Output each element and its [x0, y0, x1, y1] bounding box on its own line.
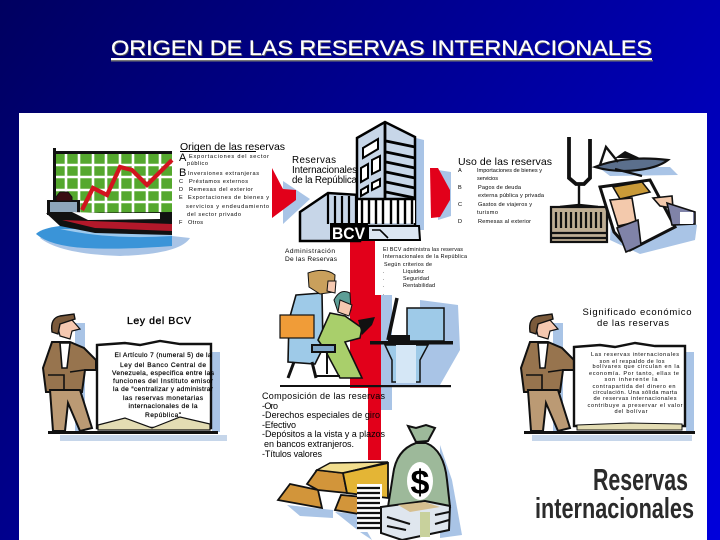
- text block: administración BCV: .: [383, 269, 384, 275]
- arrow: origin into reserves: [272, 168, 310, 224]
- label: reservas internacionales: de la República: [292, 175, 358, 186]
- text block: composición de las reservas: Composición de las reservas: [262, 391, 386, 401]
- illustration: ship and growth chart: [36, 148, 190, 256]
- text block: significado de las reservas: de reservas internacionales: [594, 396, 677, 402]
- logotype: reservas internacionales: [535, 462, 694, 525]
- text block: significado de las reservas: bolívares que circulan en la: [592, 364, 680, 370]
- red vertical connector bar: [350, 238, 445, 460]
- white content panel: [19, 113, 707, 540]
- text block: administración BCV: El BCV administra las reservas: [383, 247, 463, 253]
- text block: uso de las reservas: Uso de las reservas: [458, 156, 552, 168]
- text block: origen de las reservas: [179, 141, 285, 226]
- text block: composición de las reservas: [261, 388, 386, 460]
- text block: composición de las reservas: -Oro: [262, 401, 278, 411]
- text block: uso de las reservas: Remesas al exterior: [478, 219, 531, 225]
- text block: significado de las reservas: del bolívar: [614, 409, 648, 415]
- text block: significado de las reservas: Las reservas internacionales: [591, 352, 679, 358]
- text block: administración BCV: .: [383, 276, 384, 282]
- text block: significado de las reservas: [588, 352, 683, 415]
- text block: uso de las reservas: [458, 156, 552, 225]
- text block: administración BCV: Seguridad: [403, 276, 429, 282]
- text block: significado de las reservas: economía. Por tanto, ellas te: [589, 371, 679, 377]
- text block: uso de las reservas: turismo: [477, 210, 498, 216]
- label: administración de las reservas: De las Reservas: [285, 256, 338, 263]
- heading: significado económico: de las reservas: [597, 318, 669, 329]
- text block: uso de las reservas: Importaciones de bienes y: [477, 168, 542, 174]
- illustration: gold bars, coins and money bag: [278, 425, 462, 540]
- text block: artículo de la ley: El Artículo 7 (numeral 5) de la: [114, 352, 212, 359]
- illustration: people at computer desk: [280, 270, 460, 387]
- label: reservas internacionales: [292, 155, 358, 186]
- text block: artículo de la ley: Venezuela, especifica entre las: [112, 370, 215, 377]
- text block: administración BCV: .: [383, 291, 384, 297]
- text block: origen de las reservas: D: [179, 187, 183, 193]
- text block: composición de las reservas: -Efectivo: [262, 420, 296, 430]
- text block: artículo de la ley: funciones del Instituto emisor: [113, 378, 214, 385]
- text block: administración BCV: Según criterios de: [384, 262, 432, 268]
- text block: uso de las reservas: Gastos de viajeros y: [478, 202, 532, 208]
- text block: origen de las reservas: Origen de las reservas: [180, 141, 285, 153]
- heading: significado económico: [582, 307, 692, 329]
- text block: administración BCV: Liquidez: [403, 269, 424, 275]
- illustration: man with open book (right): [521, 314, 695, 441]
- label: reservas internacionales: Internacionales: [292, 165, 357, 176]
- illustration: man with open book (left): [43, 314, 227, 441]
- title: ORIGEN DE LAS RESERVAS INTERNACIONALES: [112, 38, 653, 61]
- text block: artículo de la ley: Ley del Banco Central de: [120, 362, 206, 369]
- heading: significado económico: Significado económico: [582, 307, 692, 318]
- text block: artículo de la ley: internacionales de la: [128, 403, 198, 410]
- text block: origen de las reservas: del sector privado: [187, 212, 241, 218]
- text block: origen de las reservas: F: [179, 220, 183, 226]
- illustration: gold bars, coins and money bag: $: [411, 464, 430, 502]
- text block: origen de las reservas: servicios y endeudamiento: [186, 204, 269, 210]
- text block: origen de las reservas: A: [179, 152, 187, 164]
- text block: origen de las reservas: E: [179, 195, 183, 201]
- illustration: trade, crane, plane and clipboard: [551, 137, 697, 254]
- text block: significado de las reservas: contribuye a preservar el valor: [588, 403, 683, 409]
- text block: composición de las reservas: -Depósitos a la vista y a plazos: [262, 429, 386, 439]
- text block: significado de las reservas: son inherente la: [604, 377, 658, 383]
- text block: origen de las reservas: Préstamos externos: [189, 179, 248, 185]
- illustration: BCV bank building: [300, 122, 424, 243]
- text block: administración BCV: Internacionales de la República: [383, 254, 467, 260]
- heading: ley del BCV: Ley del BCV: [127, 315, 191, 327]
- text block: significado de las reservas: contrapartida del dinero en: [592, 384, 676, 390]
- illustration: BCV bank building: BCV: [332, 224, 366, 243]
- text block: uso de las reservas: servicios: [477, 176, 498, 182]
- text block: uso de las reservas: B: [458, 185, 462, 191]
- label: administración de las reservas: [285, 248, 338, 263]
- text block: composición de las reservas: -Títulos valores: [262, 449, 322, 459]
- title: ORIGEN DE LAS RESERVAS INTERNACIONALES: [111, 37, 652, 60]
- text block: artículo de la ley: República”: [145, 412, 181, 419]
- text block: origen de las reservas: C: [179, 179, 183, 185]
- text block: origen de las reservas: Remesas del exterior: [189, 187, 253, 193]
- text block: significado de las reservas: circulación. Una sólida marta: [593, 390, 678, 396]
- text block: artículo de la ley: la de “centralizar y administrar: [113, 386, 214, 393]
- text block: uso de las reservas: D: [458, 219, 462, 225]
- text block: uso de las reservas: A: [458, 168, 462, 174]
- text block: significado de las reservas: son el respaldo de los: [600, 359, 665, 365]
- text block: uso de las reservas: externa pública y privada: [478, 193, 545, 199]
- text block: uso de las reservas: C: [458, 202, 462, 208]
- label: reservas internacionales: Reservas: [292, 155, 336, 166]
- text block: uso de las reservas: Pagos de deuda: [478, 185, 522, 191]
- text block: origen de las reservas: Exportaciones del sector: [189, 154, 269, 160]
- text block: administración BCV: [383, 247, 467, 297]
- text block: origen de las reservas: B: [179, 167, 186, 179]
- text block: composición de las reservas: en bancos extranjeros.: [264, 439, 354, 449]
- text block: administración BCV: Rentabilidad: [403, 283, 435, 289]
- label: administración de las reservas: Administración: [285, 248, 335, 255]
- text block: composición de las reservas: -Derechos especiales de giro: [262, 410, 380, 420]
- arrow: reserves to uses: [430, 168, 451, 220]
- text block: origen de las reservas: Exportaciones de bienes y: [188, 195, 269, 201]
- text block: artículo de la ley: [112, 352, 215, 419]
- text block: origen de las reservas: Inversiones extranjeras: [188, 171, 259, 177]
- text block: origen de las reservas: público: [187, 161, 208, 167]
- text block: administración BCV: .: [383, 283, 384, 289]
- text block: origen de las reservas: Otros: [188, 220, 203, 226]
- text block: artículo de la ley: las reservas monetarias: [123, 395, 204, 402]
